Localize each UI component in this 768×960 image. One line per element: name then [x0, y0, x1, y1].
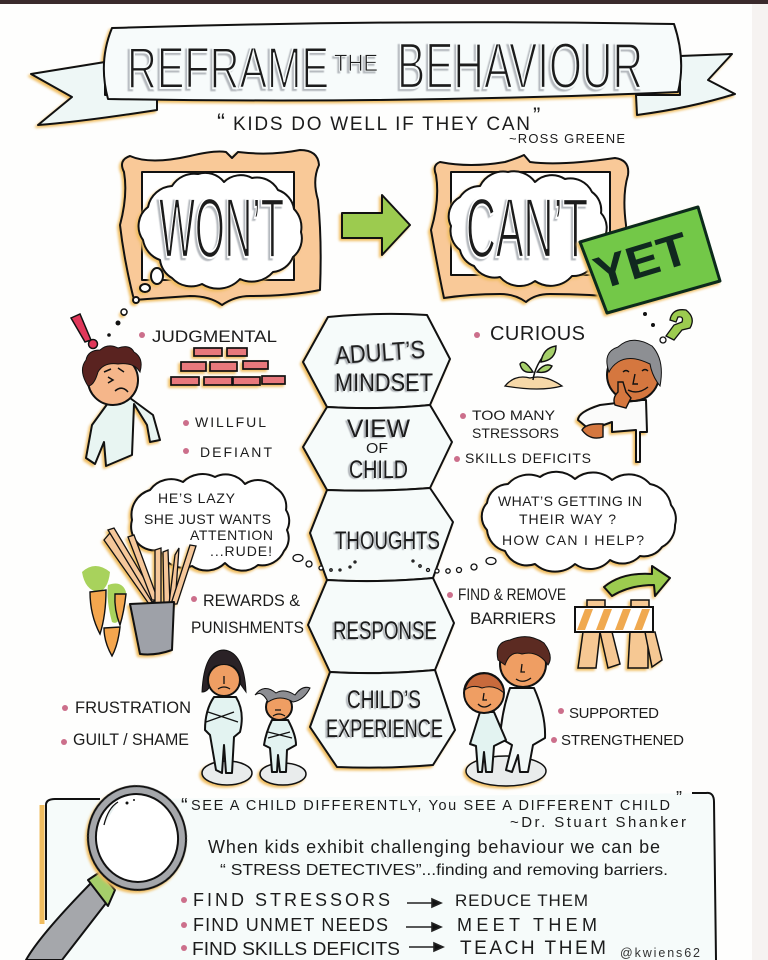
hexagon: response — [308, 578, 454, 673]
hexagon: view of child — [303, 405, 452, 491]
text: shanker quote — [181, 788, 686, 831]
credit: @kwiens62 — [620, 946, 700, 960]
thought bubble: left: HE’S LAZY — [158, 490, 236, 506]
title text: THE — [334, 50, 378, 77]
thought bubble: right: THEIR WAY ? — [519, 511, 616, 527]
list: find and reduce actions: FIND STRESSORS — [193, 890, 390, 910]
hexagon: view of child: CHILD — [349, 456, 408, 484]
hexagon: view of child: OF — [366, 440, 388, 457]
cup — [130, 602, 174, 654]
hexagon: child's experience — [310, 670, 455, 768]
arrows — [406, 899, 443, 951]
text: find and remove barriers: FIND & REMOVE — [458, 585, 566, 604]
title banner — [31, 22, 735, 125]
text: find and remove barriers: BARRIERS — [470, 609, 556, 628]
thought bubble: right: HOW CAN I HELP? — [502, 532, 644, 548]
text: stress detectives explanation: “ STRESS DETECTIVES”...finding and removing barriers. — [220, 862, 668, 879]
text: shanker quote: ~Dr. Stuart Shanker — [510, 814, 686, 831]
text: frustration and guilt: FRUSTRATION — [75, 698, 191, 717]
icon: road barrier — [575, 600, 662, 668]
thought dots: left — [293, 554, 356, 571]
title text — [127, 29, 643, 102]
thought cloud: won't — [122, 173, 302, 315]
text: find and remove barriers — [447, 585, 566, 628]
text: right mindset and view bullets: STRESSORS — [472, 425, 559, 441]
quote: kids do well if they can: ” — [533, 103, 540, 128]
frame: won't — [120, 150, 321, 315]
hexagon: thoughts — [310, 488, 453, 581]
thought bubble: right: WHAT’S GETTING IN — [498, 493, 642, 509]
icon: green curved arrow — [604, 566, 670, 596]
icon: sprout — [505, 346, 562, 389]
taller child — [497, 637, 550, 772]
bricks icon — [171, 348, 285, 385]
thought cloud: can't — [449, 171, 607, 286]
list: find and reduce actions: MEET THEM — [457, 915, 597, 935]
panel: stress detectives — [42, 793, 716, 960]
hexagon: thoughts: THOUGHTS — [335, 527, 440, 555]
text: right mindset and view bullets: SKILLS DEFICITS — [465, 450, 591, 466]
smaller child — [464, 673, 506, 772]
text: shanker quote: SEE A CHILD DIFFERENTLY, You SEE A DIFFERENT CHILD — [191, 798, 670, 814]
yet sign — [580, 207, 720, 313]
carrots — [82, 566, 126, 656]
icon: question mark and dots — [643, 310, 692, 343]
text: rewards and punishments: PUNISHMENTS — [191, 618, 304, 637]
text: shanker quote: ” — [676, 788, 682, 808]
text: shanker quote: “ — [181, 795, 188, 817]
thought bubble: right — [412, 472, 676, 573]
quote: kids do well if they can: ~ROSS GREENE — [509, 131, 625, 146]
yet sign: YET — [588, 222, 695, 300]
text: right mindset and view bullets: CURIOUS — [490, 323, 585, 345]
figure: thinking adult — [578, 340, 661, 462]
text: left mindset and view bullets: JUDGMENTAL — [152, 327, 277, 346]
hexagon: child's experience: EXPERIENCE — [326, 715, 443, 743]
figures: supported children — [464, 637, 550, 786]
list: find and reduce actions: REDUCE THEM — [455, 891, 588, 910]
shadows under feet — [202, 761, 306, 785]
hexagon: adult's mindset: MINDSET — [335, 369, 433, 397]
text: stress detectives explanation — [208, 837, 668, 879]
arrow: won't to can't — [342, 195, 410, 255]
icon: sticks in a cup and carrots — [82, 528, 196, 656]
figures: frustrated girls — [202, 650, 310, 785]
hexagon stack — [303, 314, 455, 768]
text: supported and strengthened: SUPPORTED — [569, 705, 659, 722]
thought bubble: left: SHE JUST WANTS — [144, 511, 271, 527]
quote: kids do well if they can — [217, 103, 625, 146]
text: stress detectives explanation: When kids exhibit challenging behaviour we can be — [208, 837, 660, 857]
hexagon: response: RESPONSE — [333, 617, 437, 645]
title text: REFRAME — [127, 36, 329, 101]
taller girl — [202, 650, 246, 773]
list: find and reduce actions: TEACH THEM — [460, 938, 606, 959]
frame: won't: WON’T — [159, 181, 284, 275]
text: right mindset and view bullets: TOO MANY — [472, 407, 556, 423]
quote: kids do well if they can: KIDS DO WELL IF THEY CAN — [233, 114, 530, 135]
frame: can't: CAN’T — [466, 181, 588, 275]
small girl — [255, 687, 310, 772]
text: right mindset and view bullets — [454, 323, 591, 466]
figure: frowning boy — [82, 346, 160, 466]
hexagon: adult's mindset: ADULT’S — [334, 336, 426, 370]
text: frustration and guilt — [61, 698, 191, 749]
list: find and reduce actions: FIND SKILLS DEFICITS — [192, 939, 400, 959]
text: left mindset and view bullets: WILLFUL — [195, 414, 266, 430]
hexagon: view of child: VIEW — [347, 415, 410, 443]
thought bubble: left: ATTENTION — [190, 527, 273, 543]
frame: can't — [431, 155, 628, 302]
hexagon: child's experience: CHILD’S — [347, 686, 421, 714]
list: find and reduce actions — [181, 890, 606, 959]
text: supported and strengthened: STRENGTHENED — [561, 732, 684, 749]
text: left mindset and view bullets: DEFIANT — [200, 444, 272, 460]
text: left mindset and view bullets — [139, 327, 277, 460]
list: find and reduce actions: FIND UNMET NEEDS — [193, 915, 388, 935]
thought bubble: left — [131, 474, 356, 571]
text: supported and strengthened — [551, 705, 684, 749]
hexagon: adult's mindset — [303, 314, 450, 408]
text: rewards and punishments — [191, 591, 304, 637]
thought dots: right — [412, 558, 496, 573]
quote: kids do well if they can: “ — [217, 109, 225, 136]
thought bubble: left: ...RUDE! — [210, 543, 272, 559]
icon: red exclamation mark and dots — [71, 309, 127, 348]
title text: BEHAVIOUR — [397, 29, 643, 102]
text: frustration and guilt: GUILT / SHAME — [73, 730, 189, 749]
icon: magnifying glass — [26, 780, 193, 960]
text: rewards and punishments: REWARDS & — [203, 591, 301, 610]
